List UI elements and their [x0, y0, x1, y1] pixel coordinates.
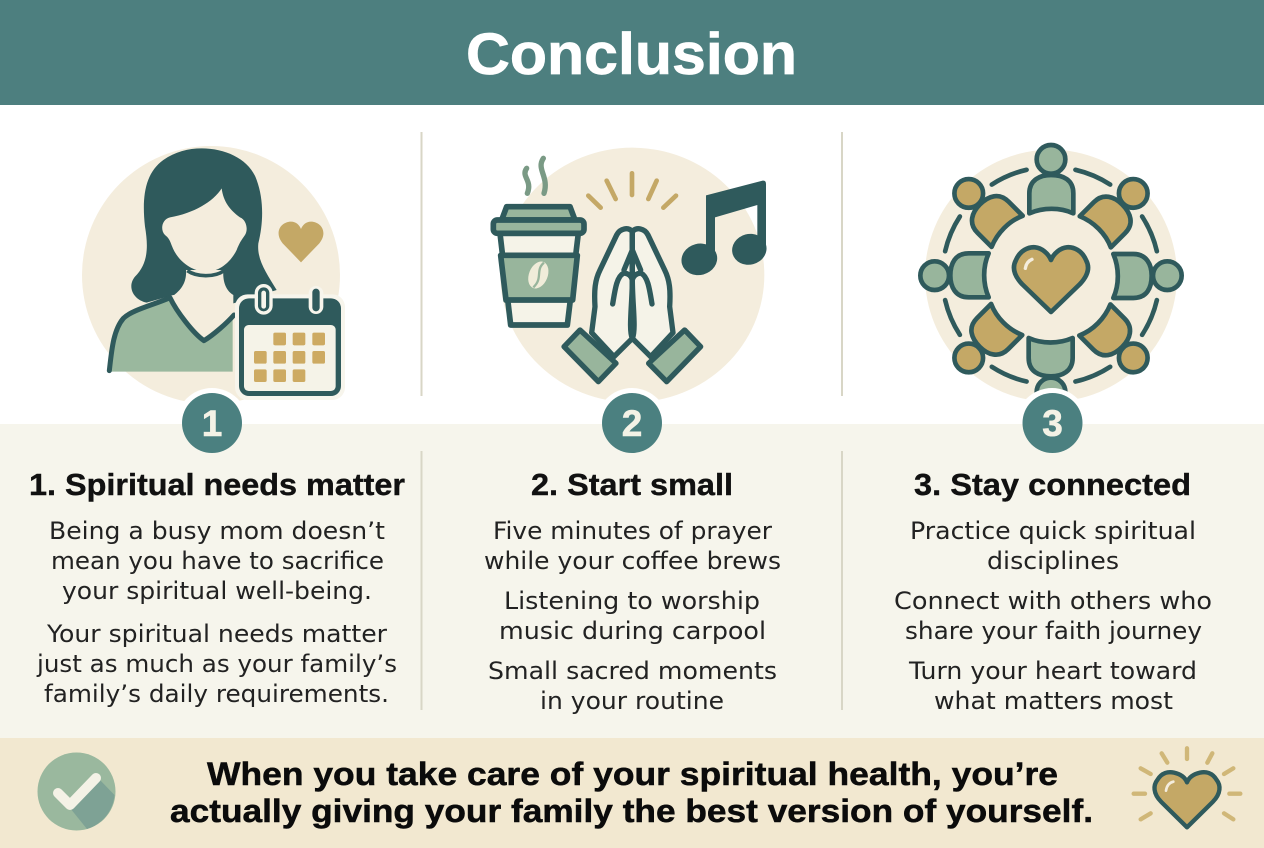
hair: [131, 148, 277, 303]
coffee cup: [493, 207, 584, 325]
icon: radiant heart: [1134, 748, 1240, 827]
body 2: music during carpool: [499, 617, 766, 645]
badge 3: 3: [1042, 403, 1063, 444]
body 3: share your faith journey: [905, 617, 1202, 645]
body 2: Five minutes of prayer: [493, 517, 772, 545]
badge 3: [1016, 388, 1088, 453]
music note: [678, 181, 770, 279]
neck: [173, 270, 233, 340]
footer banner: [0, 738, 1264, 848]
badge 1: [176, 388, 248, 453]
calendar: [235, 284, 345, 400]
body 1: Your spiritual needs matter: [46, 620, 387, 648]
column 3 text: [894, 468, 1212, 715]
badge 1: 1: [202, 403, 222, 444]
body 1: mean you have to sacrifice: [51, 547, 384, 575]
badge 2: 2: [622, 403, 642, 444]
column 1 text: [29, 468, 405, 708]
body 3: what matters most: [934, 687, 1173, 715]
closing message: actually giving your family the best version of yourself.: [170, 793, 1093, 829]
header banner: [0, 0, 1264, 105]
body 3: disciplines: [987, 547, 1119, 575]
body 3: Turn your heart toward: [908, 657, 1197, 685]
body 3: [894, 517, 1212, 715]
body 1: Being a busy mom doesn’t: [49, 517, 385, 545]
closing message: When you take care of your spiritual health, you’re: [207, 756, 1058, 792]
body 1: [36, 517, 397, 708]
icon: coffee, praying hands and music note: [493, 148, 770, 402]
icon: circle of people around a heart: [920, 145, 1182, 406]
heart: [279, 222, 323, 262]
connecting arcs: [944, 168, 1158, 383]
heading 3: 3. Stay connected: [914, 468, 1191, 502]
praying hands: [564, 229, 701, 382]
center heart: [1014, 247, 1088, 312]
icon: woman with heart and calendar: [82, 146, 345, 404]
title: Conclusion: [466, 22, 797, 87]
closing message: [170, 756, 1093, 829]
body 2: in your routine: [540, 687, 724, 715]
shirt: [109, 298, 233, 372]
heading 1: 1. Spiritual needs matter: [29, 468, 405, 502]
body 1: your spiritual well-being.: [62, 577, 372, 605]
radiating lines: [588, 173, 676, 208]
face: [162, 188, 247, 272]
body 2: [484, 517, 781, 715]
badge 2: [596, 388, 668, 453]
body 2: while your coffee brews: [484, 547, 781, 575]
heading 2: 2. Start small: [531, 468, 733, 502]
steam: [525, 158, 545, 193]
people: [920, 145, 1182, 406]
icon: check mark: [38, 752, 116, 830]
body 1: family’s daily requirements.: [44, 680, 389, 708]
body 2: Small sacred moments: [488, 657, 777, 685]
body 2: Listening to worship: [504, 587, 760, 615]
body 3: Connect with others who: [894, 587, 1212, 615]
column 2 text: [484, 468, 781, 715]
body 3: Practice quick spiritual: [910, 517, 1196, 545]
section band top edge and badges: [176, 388, 1088, 453]
body 1: just as much as your family’s: [36, 650, 397, 678]
